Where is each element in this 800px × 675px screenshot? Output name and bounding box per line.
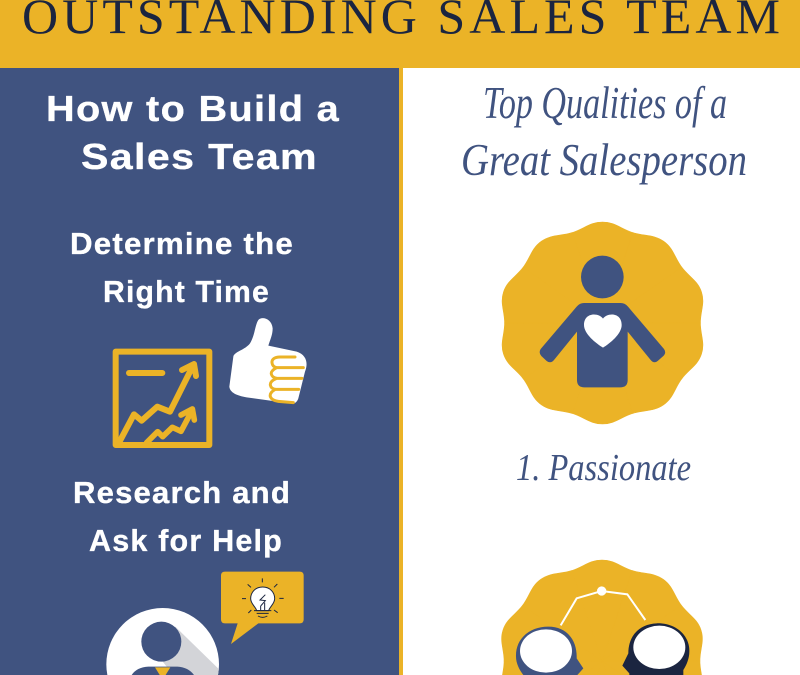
heading: how to build: How to Build a: [46, 88, 340, 129]
subheading: research and ask for help: Research and: [73, 475, 291, 510]
subheading: research and ask for help: [73, 475, 291, 558]
heading: how to build: Sales Team: [81, 136, 318, 177]
label: passionate: 1. Passionate: [516, 447, 691, 489]
icon: business person avatar: [106, 608, 230, 675]
panel: right background: [403, 68, 800, 675]
icon: person with heart: [540, 256, 665, 387]
panel: left background: [0, 68, 399, 675]
icon: light bulb: [242, 578, 284, 617]
heading: how to build: [46, 88, 340, 177]
icon: two heads connected: [516, 586, 689, 675]
subheading: determine the right time: Right Time: [103, 274, 270, 309]
subheading: determine the right time: Determine the: [70, 226, 294, 261]
badge: second quality: [494, 560, 710, 675]
icon: navy head: [622, 623, 689, 675]
icon: growth chart: [116, 352, 209, 445]
heading: top qualities: Top Qualities of a: [483, 78, 727, 128]
icon: thumbs up: [229, 318, 307, 404]
badge: passionate: [494, 222, 711, 424]
panel divider: [399, 68, 403, 675]
subheading: determine the right time: [70, 226, 294, 309]
title banner: [0, 0, 800, 68]
heading: top qualities: [461, 78, 747, 185]
icon: blue head: [516, 627, 583, 675]
heading: top qualities: Great Salesperson: [461, 135, 747, 185]
subheading: research and ask for help: Ask for Help: [89, 523, 283, 558]
icon: speech bubble with light bulb: [221, 572, 304, 644]
connection line: [561, 586, 645, 625]
